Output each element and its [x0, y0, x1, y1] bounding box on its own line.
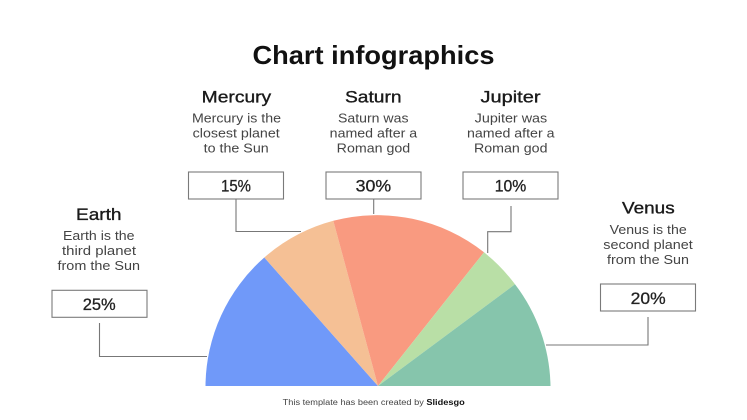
semicircle pie chart: [206, 215, 550, 386]
description: Mercury: [192, 110, 281, 156]
slice: Mercury 15%: [264, 221, 378, 386]
slice: Earth 25%: [206, 258, 378, 386]
description: Saturn: Saturn was: [338, 110, 409, 126]
panel: Venus: [600, 199, 696, 311]
heading: Jupiter: Jupiter: [480, 88, 541, 106]
slice: Jupiter 10%: [378, 252, 515, 386]
description: Mercury: closest planet: [193, 126, 280, 140]
description: Venus: Venus is the: [610, 222, 687, 237]
connector: Earth: [100, 323, 207, 356]
value box: 15%: 15%: [221, 176, 251, 196]
panel: Jupiter: [463, 88, 558, 199]
description: Mercury: Mercury is the: [192, 110, 281, 126]
description: Venus: second planet: [603, 237, 693, 252]
description: Earth: Earth is the: [63, 228, 134, 243]
description: Jupiter: [467, 110, 555, 156]
panel: Earth: [52, 206, 147, 317]
description: Mercury: to the Sun: [204, 140, 269, 156]
title: Chart infographics: [252, 40, 494, 70]
value box: 20%: 20%: [631, 289, 666, 308]
description: Jupiter: Jupiter was: [475, 110, 548, 126]
description: Saturn: [330, 110, 418, 156]
slice: Venus 20%: [378, 284, 550, 386]
description: Jupiter: Roman god: [474, 140, 548, 156]
heading: Venus: Venus: [622, 199, 675, 217]
connector: Jupiter: [488, 206, 511, 253]
connector: Saturn: [373, 199, 375, 214]
value box: 10%: 10%: [495, 176, 526, 196]
connector: Venus: [546, 317, 648, 345]
value box: 25%: 25%: [83, 295, 116, 314]
panel: Saturn: [326, 88, 421, 199]
connector: Mercury: [236, 199, 301, 232]
description: Jupiter: named after a: [467, 126, 555, 140]
description: Earth: from the Sun: [58, 258, 140, 273]
value box: 30%: 30%: [356, 176, 391, 196]
description: Earth: third planet: [62, 243, 136, 258]
description: Saturn: named after a: [330, 126, 418, 140]
description: Saturn: Roman god: [337, 140, 410, 156]
description: Venus: from the Sun: [607, 252, 689, 267]
slice: Saturn 30%: [333, 215, 484, 386]
description: Venus: [603, 222, 693, 267]
heading: Saturn: Saturn: [345, 88, 402, 106]
heading: Mercury: Mercury: [202, 88, 272, 106]
description: Earth: [58, 228, 140, 273]
panel: Mercury: [188, 88, 284, 199]
footer credit: This template has been created by Slidesgo: [283, 398, 465, 407]
heading: Earth: Earth: [76, 206, 122, 224]
